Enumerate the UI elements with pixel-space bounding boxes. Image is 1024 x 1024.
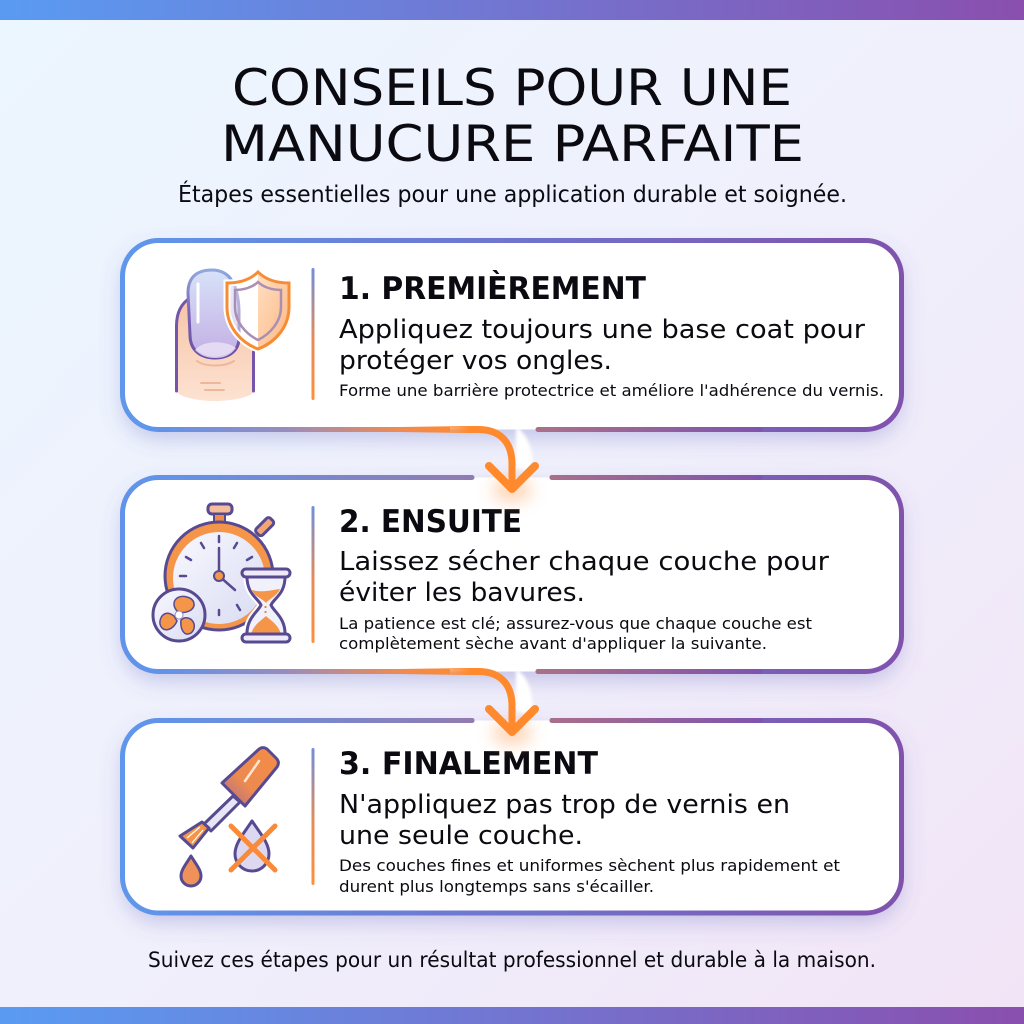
- step 3 text: 3. FINALEMENT: [339, 746, 598, 782]
- title: MANUCURE PARFAITE: [221, 115, 804, 173]
- step 2 text: [339, 504, 829, 653]
- step 3 text: durent plus longtemps sans s'écailler.: [339, 877, 654, 896]
- divider 1: [312, 268, 314, 400]
- step 3 text: N'appliquez pas trop de vernis en: [339, 790, 790, 820]
- subtitle: Étapes essentielles pour une application durable et soignée.: [178, 180, 847, 208]
- step 2 text: Laissez sécher chaque couche pour: [339, 547, 829, 577]
- panel: step 2: [122, 478, 902, 672]
- footer note: Suivez ces étapes pour un résultat professionnel et durable à la maison.: [148, 948, 876, 972]
- crossed-out drop: [231, 821, 275, 871]
- icon: stopwatch, fan and hourglass: [153, 504, 290, 642]
- small orange drop: [181, 856, 201, 886]
- step 2 text: 2. ENSUITE: [339, 504, 522, 540]
- step 2 text: La patience est clé; assurez-vous que chaque couche est: [339, 614, 812, 633]
- panel: step 3: [122, 720, 902, 913]
- step 3 text: une seule couche.: [339, 821, 583, 851]
- step 3 text: [339, 746, 840, 896]
- step 3 text: Des couches fines et uniformes sèchent plus rapidement et: [339, 856, 840, 875]
- title: CONSEILS POUR UNE: [232, 59, 792, 117]
- step 1 text: Forme une barrière protectrice et améliore l'adhérence du vernis.: [339, 381, 884, 400]
- icon: finger with nail and shield: [176, 270, 289, 401]
- arrow: step 2 to step 3: [400, 670, 535, 745]
- step 1 text: 1. PREMIÈREMENT: [339, 271, 646, 307]
- divider 2: [312, 506, 314, 643]
- step 2 text: complètement sèche avant d'appliquer la suivante.: [339, 634, 767, 653]
- icon: nail polish brush and drops: [180, 748, 278, 886]
- bottom gradient bar: [0, 1007, 1024, 1024]
- top gradient bar: [0, 0, 1024, 20]
- title: [221, 59, 804, 173]
- divider 3: [312, 748, 314, 885]
- step 2 text: éviter les bavures.: [339, 578, 585, 608]
- hourglass: [242, 569, 290, 642]
- step 1 text: protéger vos ongles.: [339, 346, 612, 376]
- step 1 text: Appliquez toujours une base coat pour: [339, 315, 865, 345]
- fan: [153, 589, 205, 641]
- step 1 text: [339, 271, 884, 400]
- arrow: step 1 to step 2: [400, 428, 535, 502]
- panel: step 1: [122, 240, 902, 430]
